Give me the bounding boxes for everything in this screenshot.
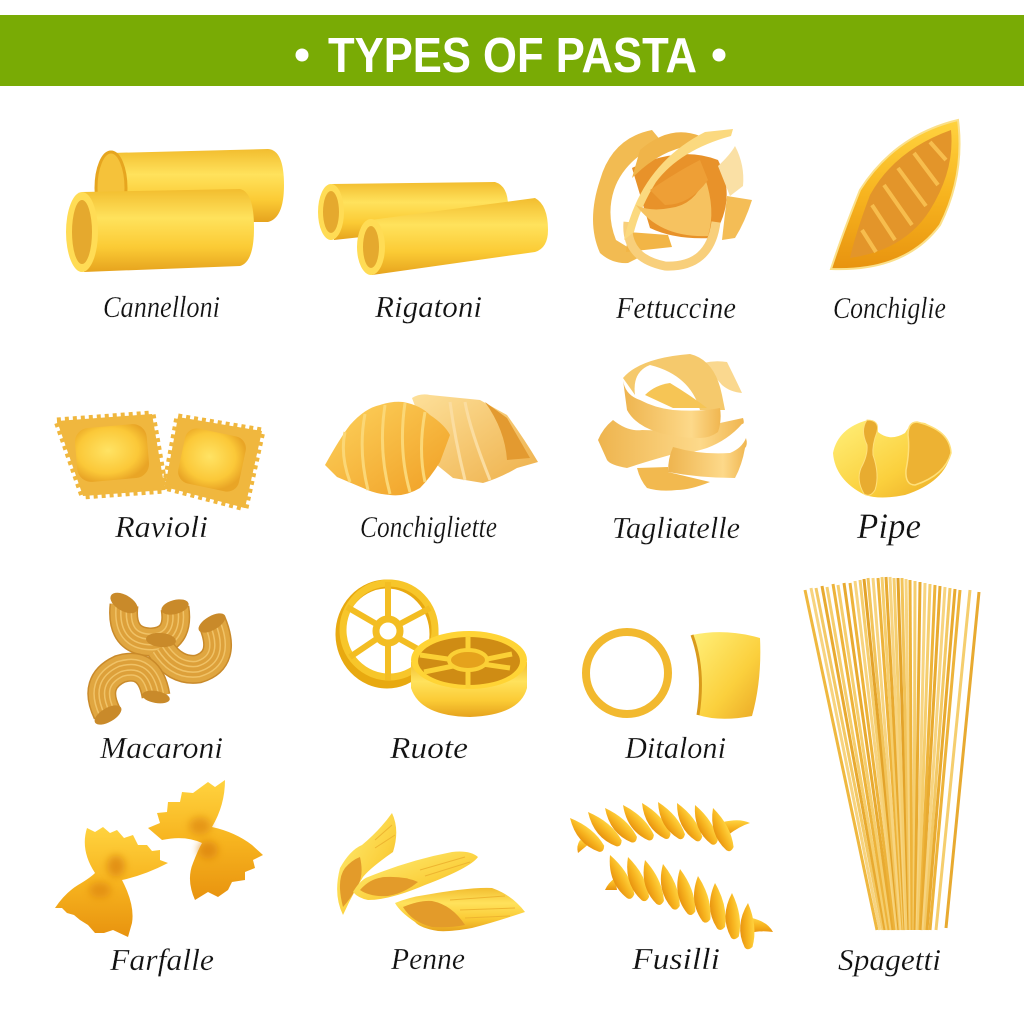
pasta: fettuccine [593, 129, 752, 266]
pasta: conchiglie [831, 120, 960, 269]
pasta: farfalle [55, 780, 263, 937]
label: Fettuccine: Fettuccine [615, 290, 736, 325]
pasta: ruote [340, 582, 527, 717]
label: Macaroni: Macaroni [99, 730, 223, 765]
pasta: tagliatelle [598, 354, 747, 491]
label: Ditaloni: Ditaloni [624, 730, 726, 765]
pasta: ditaloni [586, 632, 760, 719]
label: Rigatoni: Rigatoni [374, 289, 482, 324]
title banner: TYPES OF PASTA [328, 29, 697, 83]
label: Conchiglie: Conchiglie [833, 290, 946, 325]
label: Ruote: Ruote [389, 730, 468, 765]
label: Conchigliette: Conchigliette [360, 509, 497, 544]
label: Tagliatelle: Tagliatelle [612, 510, 740, 545]
label: Spagetti: Spagetti [838, 942, 941, 977]
pasta: conchigliette [325, 394, 538, 495]
pasta: fusilli [564, 799, 773, 950]
pasta: penne [337, 813, 525, 931]
label: Cannelloni: Cannelloni [103, 289, 220, 324]
label: Fusilli: Fusilli [631, 941, 720, 976]
pasta: macaroni [92, 589, 228, 729]
label: Ravioli: Ravioli [114, 509, 208, 544]
pasta: rigatoni [318, 182, 548, 275]
pasta: ravioli [57, 414, 262, 508]
title banner [0, 15, 1024, 86]
label: Pipe: Pipe [856, 506, 921, 546]
pasta: spaghetti [805, 577, 979, 930]
pasta: cannelloni [66, 149, 284, 272]
label: Penne: Penne [390, 941, 465, 976]
label: Farfalle: Farfalle [109, 942, 214, 977]
pasta: pipe [833, 420, 951, 498]
